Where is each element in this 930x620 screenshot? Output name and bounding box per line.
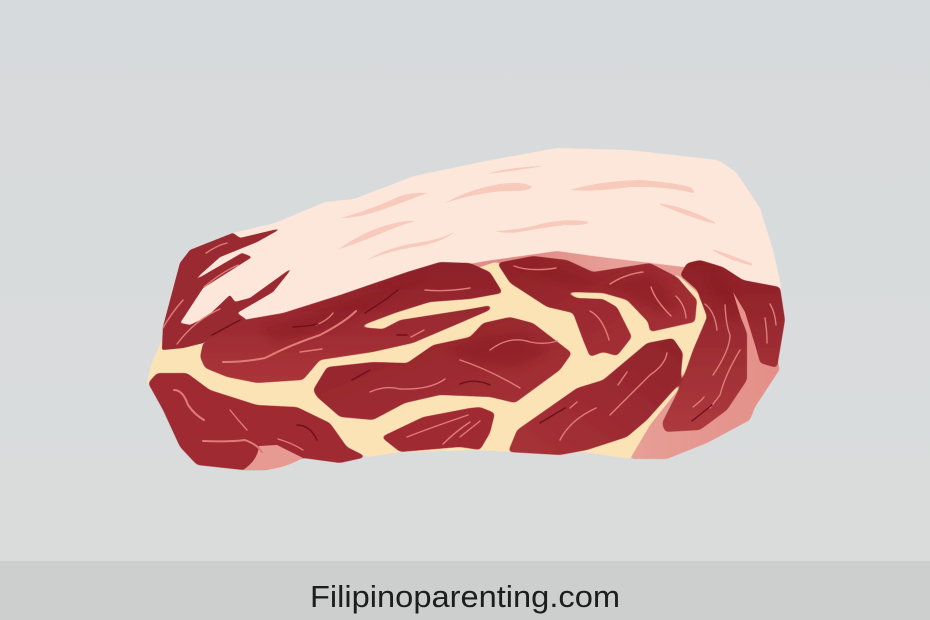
chunk: far right [662, 260, 785, 432]
pink membrane and lower rim [205, 251, 780, 459]
watermark bar [0, 561, 930, 620]
cream fat marbling base [146, 262, 708, 459]
chunk: lower-left [148, 373, 367, 470]
pale pink stripe on far-right chunk [733, 292, 760, 363]
chunk: bottom small [381, 407, 495, 452]
chunk: lower right [508, 338, 683, 455]
fat streaks [339, 166, 752, 265]
chunk: upper-left fingers [162, 228, 293, 350]
fat cap [172, 148, 782, 342]
chunk: top right with vein [497, 256, 697, 357]
meat veins (pink) [163, 243, 776, 452]
chunk: long upper-left [200, 262, 503, 383]
dark veins [212, 290, 712, 440]
watermark text: Filipinoparenting.com [310, 579, 620, 614]
pink patch at bottom left [243, 445, 303, 470]
meat chunks [148, 256, 785, 470]
shaded areas on chunks [262, 268, 738, 368]
chunk: centre [313, 317, 572, 420]
